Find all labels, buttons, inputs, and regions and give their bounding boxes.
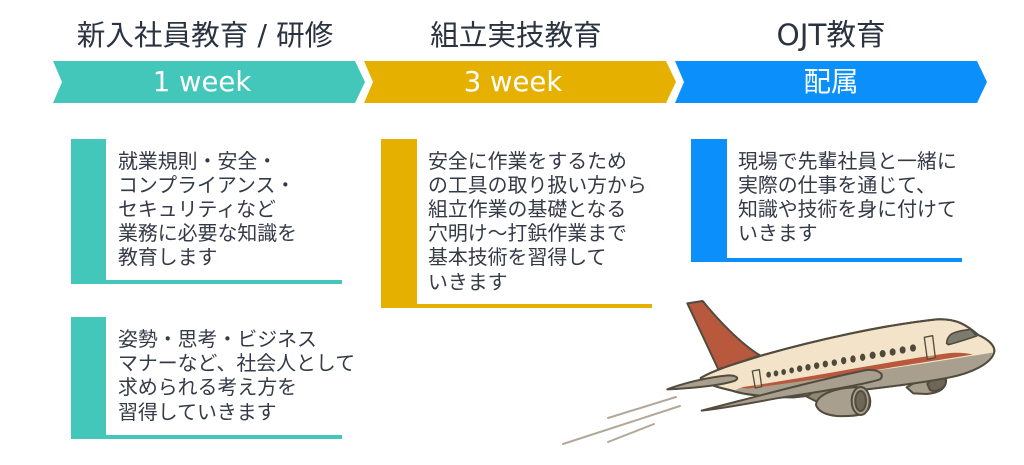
arrow: 1 week: 1 week	[153, 66, 251, 98]
text: on the job training: 現場で先輩社員と一緒に	[738, 150, 957, 172]
heading: new employee training: 新入社員教育 / 研修	[77, 18, 333, 52]
text: work rules and compliance: 業務に必要な知識を	[118, 223, 297, 245]
heading: OJT training: OJT教育	[777, 18, 885, 52]
panel: on the job training	[691, 139, 962, 262]
text: on the job training: いきます	[738, 223, 818, 245]
text: assembly skills: の工具の取り扱い方から	[428, 175, 647, 197]
arrow: assignment	[675, 61, 987, 103]
right engine	[907, 377, 946, 394]
text: assembly skills: いきます	[428, 272, 508, 294]
text: attitude and business manners	[118, 329, 355, 424]
text: work rules and compliance: コンプライアンス・	[118, 175, 295, 197]
speed lines	[563, 397, 680, 444]
text: attitude and business manners: 求められる考え方を	[118, 377, 297, 399]
tail fin	[687, 301, 760, 369]
text: attitude and business manners: 習得していきます	[118, 402, 277, 424]
panel: attitude and business manners	[71, 317, 355, 439]
text: attitude and business manners: マナーなど、社会人として	[118, 353, 355, 375]
arrow: 1 week	[53, 61, 365, 103]
text: attitude and business manners: 姿勢・思考・ビジネス	[118, 329, 317, 351]
arrow: assignment: 配属	[804, 66, 858, 98]
red stripe	[741, 353, 973, 389]
horizontal stabilizer	[667, 375, 737, 389]
cockpit window	[947, 329, 977, 345]
airplane	[667, 301, 994, 416]
belly	[733, 353, 992, 397]
text: work rules and compliance: セキュリティなど	[118, 199, 276, 221]
text: assembly skills	[428, 150, 647, 294]
doors	[924, 336, 935, 359]
fuselage outline	[701, 319, 994, 397]
text: on the job training: 実際の仕事を通じて、	[738, 175, 936, 197]
text: assembly skills: 穴明け～打鋲作業まで	[428, 223, 627, 245]
text: work rules and compliance: 教育します	[118, 247, 217, 269]
heading: assembly skills training: 組立実技教育	[430, 18, 602, 52]
text: assembly skills: 基本技術を習得して	[428, 247, 606, 269]
text: on the job training: 知識や技術を身に付けて	[738, 199, 957, 221]
windows	[766, 344, 916, 378]
panel: work rules and compliance	[71, 139, 342, 284]
arrow: 3 week	[364, 61, 676, 103]
panel: assembly skills	[381, 139, 652, 308]
text: work rules and compliance: 就業規則・安全・	[118, 150, 277, 172]
text: on the job training	[738, 150, 957, 245]
fuselage	[701, 319, 994, 397]
wing	[702, 370, 882, 411]
text: work rules and compliance	[118, 150, 297, 269]
text: assembly skills: 安全に作業をするため	[428, 150, 627, 172]
text: assembly skills: 組立作業の基礎となる	[428, 199, 626, 221]
left engine	[807, 384, 863, 403]
arrow: 3 week: 3 week	[464, 66, 562, 98]
